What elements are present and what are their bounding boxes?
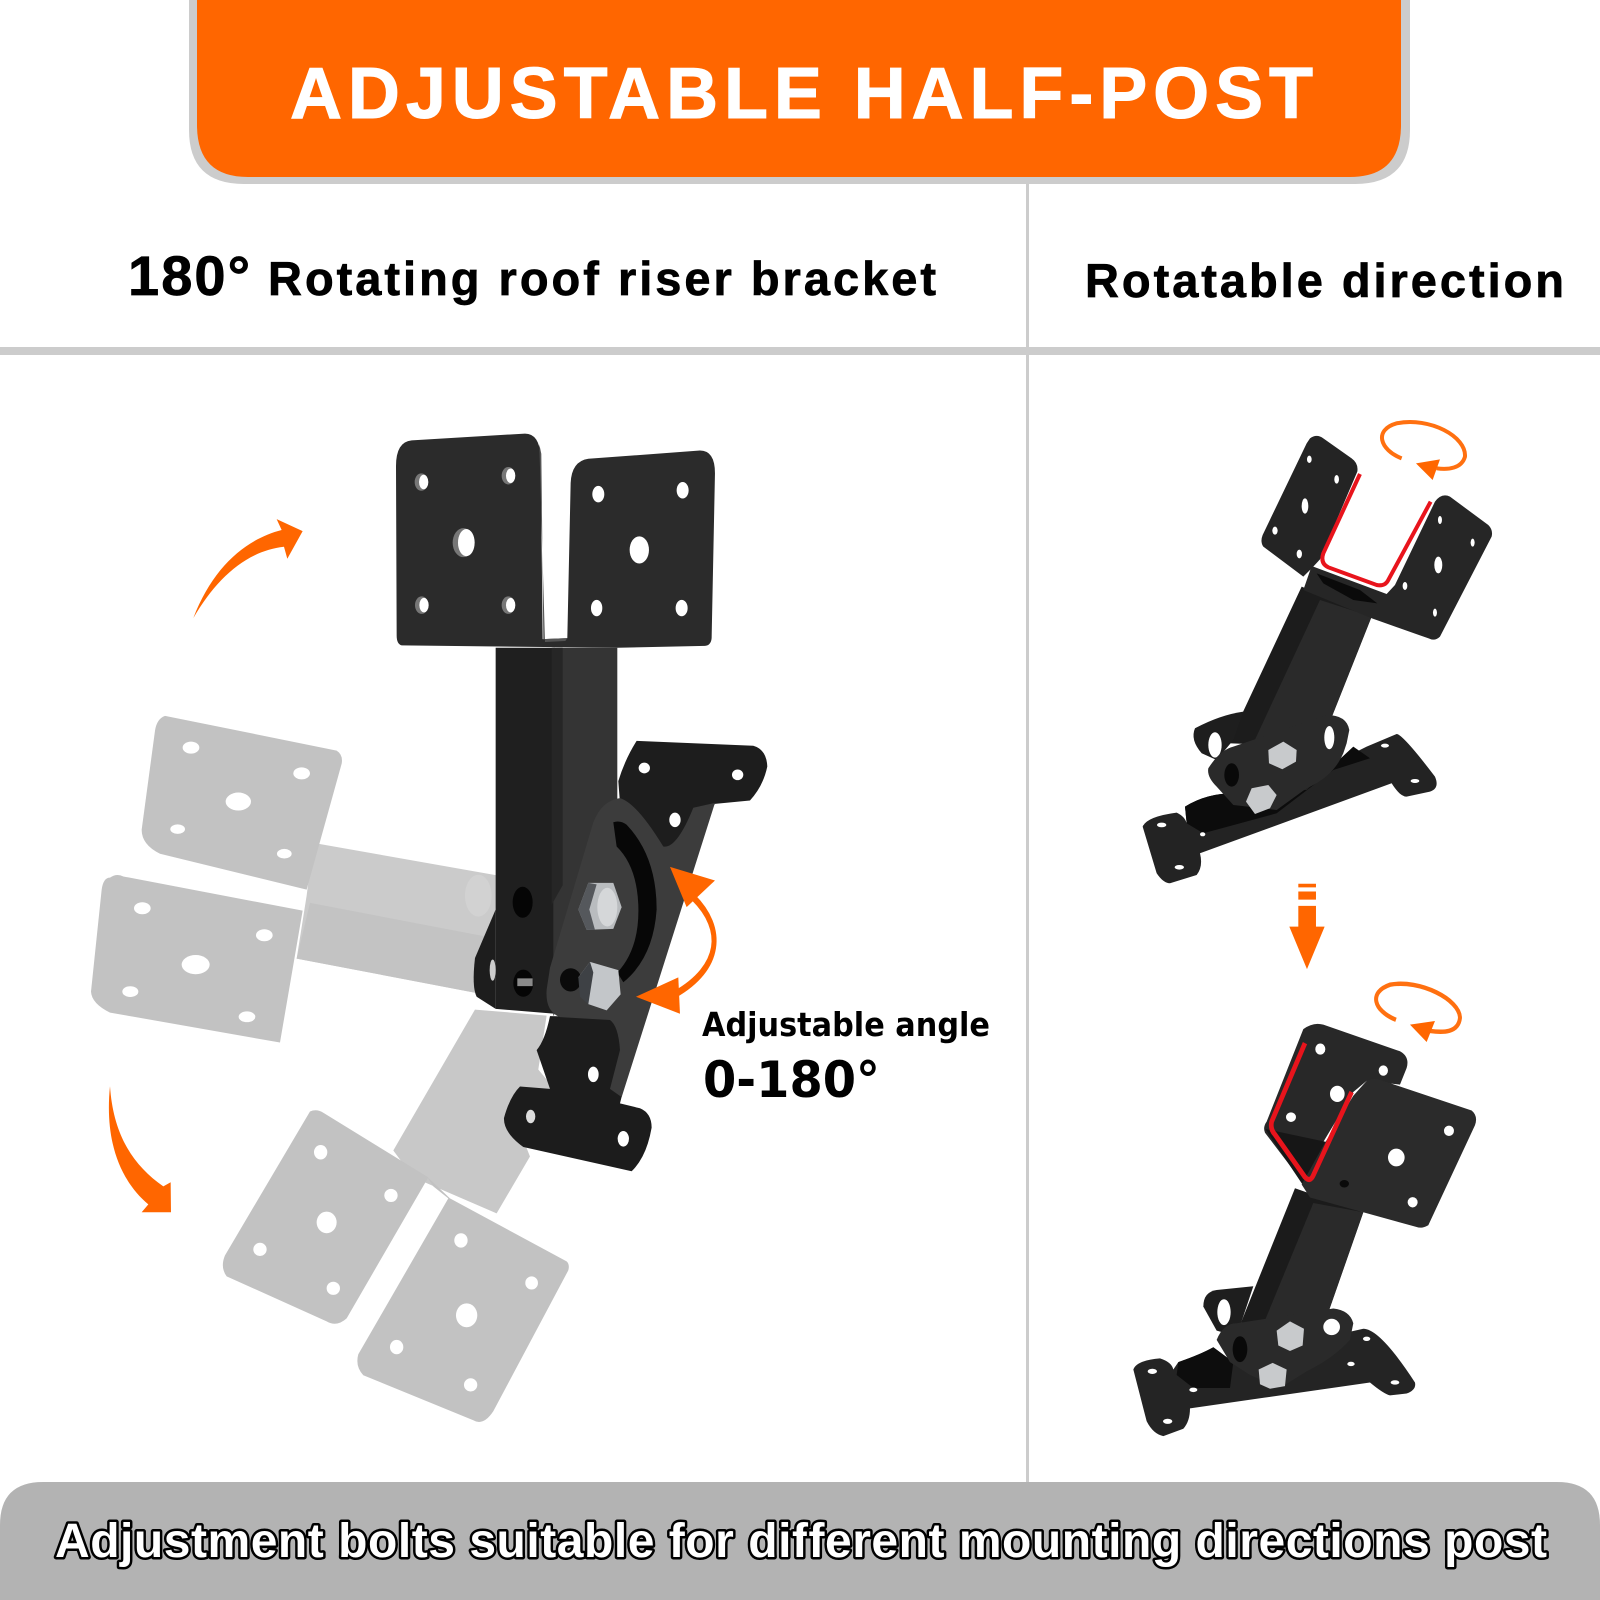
main bracket photo: [396, 434, 767, 1171]
ghost lower plate right: [357, 1176, 569, 1422]
upper bolt: [578, 883, 622, 930]
rotation arrow: [1376, 984, 1460, 1042]
title text: ADJUSTABLE HALF-POST: [290, 54, 1313, 134]
label: adjustable angle: Adjustable angle: [702, 1005, 990, 1044]
red U outline: [1271, 1043, 1352, 1179]
front plate: [1302, 1079, 1476, 1228]
ghost upper plate: [142, 716, 342, 890]
red U outline: [1322, 474, 1431, 585]
slot in bracket base: [1317, 573, 1377, 603]
rotating front plate: [546, 798, 715, 1097]
upper right bracket photo: [1143, 422, 1492, 883]
ghost lower plate left: [223, 1110, 428, 1324]
rotation arrow: [1382, 422, 1465, 480]
down arrow: [1289, 884, 1325, 969]
bottom caption bar: [0, 1482, 1600, 1600]
post: [496, 648, 617, 1016]
arrow: downward rotation: [109, 1086, 171, 1212]
U-shaped top plates: [396, 434, 715, 648]
label: angle value: 0-180°: [703, 1051, 880, 1109]
post: [1240, 1188, 1363, 1336]
ghost lower arm: [393, 1010, 553, 1213]
ghost bracket positions: [91, 519, 569, 1422]
lower bolt: [578, 962, 621, 1010]
lower right bracket photo: [1133, 884, 1476, 1436]
swivel base: [1143, 712, 1437, 883]
heading: rotating bracket: [128, 244, 936, 307]
right plate: [1303, 495, 1492, 640]
heading: rotating bracket: Rotating roof riser bracket: [268, 252, 936, 305]
ghost horizontal arm: [297, 843, 500, 995]
heading: rotatable direction: Rotatable direction: [1085, 254, 1564, 307]
back plate: [1264, 1024, 1407, 1196]
post: [1228, 587, 1372, 747]
swivel base: [1133, 1286, 1415, 1436]
bolts: [1246, 742, 1297, 814]
caption text: Adjustment bolts suitable for different mounting directions post: [55, 1515, 1547, 1568]
left plate: [1261, 436, 1358, 577]
mounting flanges: [504, 741, 767, 1171]
ghost second plate: [91, 875, 303, 1043]
title banner: [189, 0, 1410, 184]
bolts: [1259, 1321, 1304, 1389]
angle arrow double-headed: [636, 867, 715, 1014]
arrow: upward rotation: [193, 519, 303, 618]
label: adjustable angle: [702, 1005, 990, 1109]
back mounting plate left edge: [474, 910, 496, 1009]
heading: rotating bracket: 180°: [128, 244, 250, 307]
